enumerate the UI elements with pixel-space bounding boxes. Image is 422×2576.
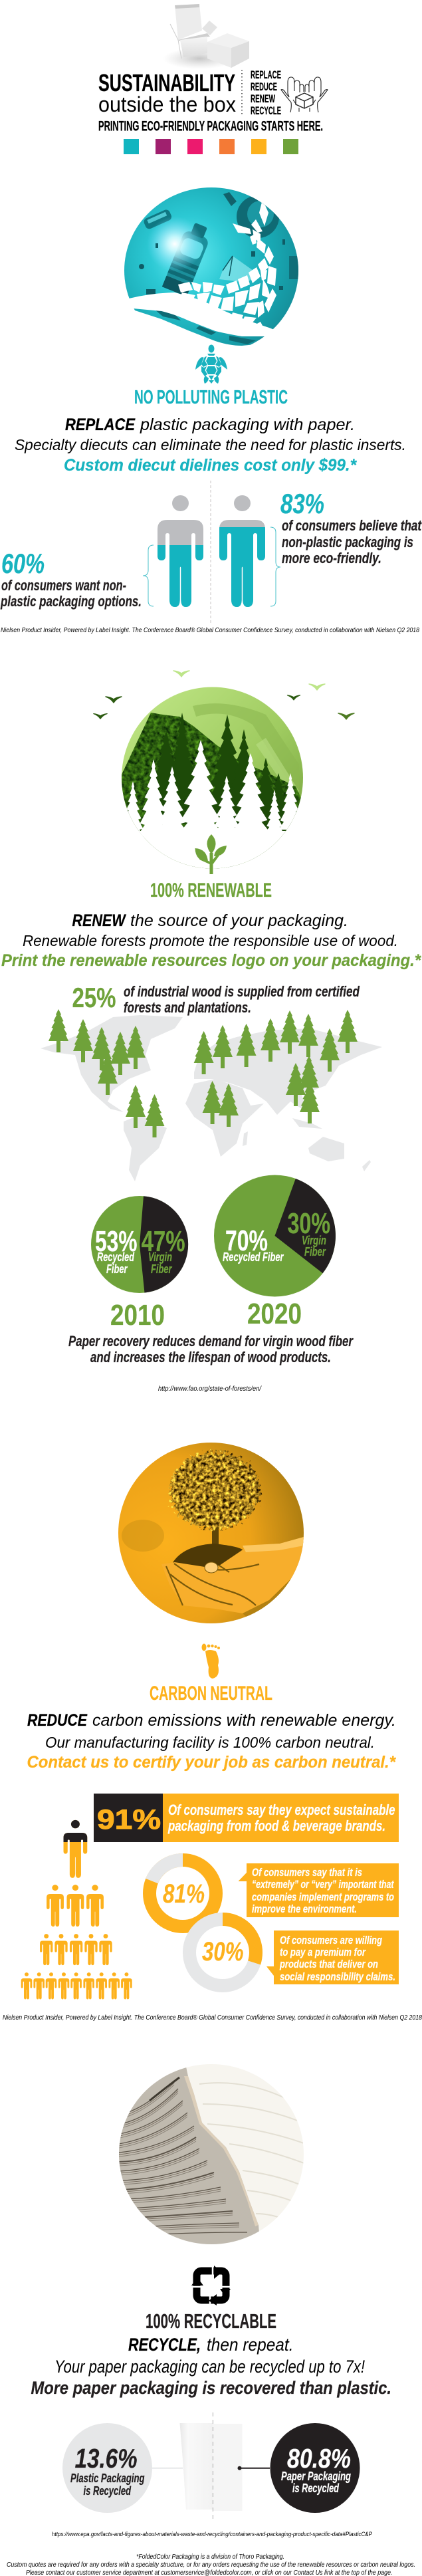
stat: 60 percent bbox=[0, 548, 142, 610]
chart: world map with trees bbox=[41, 1009, 382, 1181]
illustration: white boxes bbox=[163, 4, 249, 69]
icon: hands holding box bbox=[281, 77, 328, 112]
chart: 83 percent person bbox=[219, 495, 280, 607]
text: recycle statement: RECYCLE, bbox=[128, 2335, 201, 2355]
image: folded paper bbox=[119, 2064, 304, 2244]
text: replace reduce renew recycle bbox=[251, 68, 281, 117]
footnote: *FoldedColor Packaging is a division of Thoro Packaging. bbox=[136, 2553, 284, 2561]
icons: birds bbox=[94, 671, 354, 719]
turtle mosaic bbox=[178, 199, 276, 332]
chart: 2020 pie: 70% bbox=[225, 1225, 268, 1257]
icon: footprint bbox=[202, 1643, 220, 1679]
chart: 81 percent donut: 81% bbox=[163, 1879, 205, 1909]
icon: turtle bbox=[195, 344, 227, 384]
callout: 81 percent text bbox=[238, 1863, 399, 1917]
stat: plastic recycled: is Recycled bbox=[84, 2484, 132, 2498]
image: ocean plastic turtle bbox=[124, 187, 298, 346]
text: reduce statement: REDUCE bbox=[27, 1711, 88, 1730]
stat: 60 percent: plastic packaging options. bbox=[0, 593, 142, 610]
chart: 2010 pie: 2010 bbox=[110, 1299, 165, 1332]
stat: 25 percent certified wood: forests and plantations. bbox=[124, 999, 251, 1016]
panel: replace plastic bbox=[0, 183, 422, 634]
callout: 30 percent text: products that deliver on bbox=[279, 1958, 378, 1970]
text: recycle statement bbox=[31, 2335, 391, 2398]
stat: 83 percent: more eco-friendly. bbox=[282, 550, 381, 566]
heading: 100 percent renewable: 100% RENEWABLE bbox=[150, 879, 272, 901]
text: renew statement: RENEW bbox=[72, 911, 127, 930]
icon: recycle arrows bbox=[189, 2264, 233, 2307]
callout: 81 percent text: Of consumers say that it is bbox=[252, 1866, 362, 1879]
text: paper recovery bbox=[68, 1333, 354, 1365]
chart: 2010 pie bbox=[91, 1196, 188, 1332]
chart: 81 percent donut bbox=[140, 1850, 226, 1936]
heading: 100 percent recyclable: 100% RECYCLABLE bbox=[146, 2309, 276, 2333]
chart: 2020 pie: Virgin bbox=[302, 1234, 326, 1247]
panel: carbon neutral bbox=[3, 1439, 422, 2022]
text: reduce statement bbox=[27, 1711, 396, 1772]
text: replace statement: REPLACE bbox=[65, 415, 136, 434]
stat: 83 percent: 83% bbox=[280, 488, 324, 519]
stat: plastic recycled: 13.6% bbox=[75, 2443, 138, 2474]
chart: 2010 pie: 53% bbox=[95, 1225, 137, 1258]
stat: paper recycled: is Recycled bbox=[292, 2482, 340, 2495]
text: replace reduce renew recycle: RENEW bbox=[251, 92, 276, 105]
chart: 2010 pie: 47% bbox=[142, 1225, 185, 1258]
text: replace reduce renew recycle: RECYCLE bbox=[251, 104, 281, 117]
chart: 60 percent person bbox=[143, 495, 203, 607]
chart: 2020 pie: 2020 bbox=[247, 1298, 302, 1330]
stat: paper recycled bbox=[238, 2423, 360, 2513]
chart: 2010 pie: Virgin bbox=[148, 1250, 172, 1264]
text: reduce statement: Our manufacturing facility is 100% carbon neutral. bbox=[45, 1734, 375, 1751]
chart: 2020 pie: 30% bbox=[287, 1207, 330, 1240]
stat: plastic recycled bbox=[62, 2423, 183, 2513]
stat: 83 percent bbox=[280, 488, 422, 566]
title: SUSTAINABILITY bbox=[98, 69, 235, 96]
title: outside the box bbox=[98, 92, 236, 116]
chart: 30 percent donut bbox=[189, 1919, 256, 1986]
source url: https://www.epa.gov/facts-and-figures-about-materials-waste-and-recycling/containers-and-packaging-product-specific-data#PlasticC&P bbox=[52, 2531, 373, 2538]
text: recycle statement: then repeat. bbox=[207, 2335, 294, 2355]
lower wave band texture bbox=[154, 309, 256, 344]
chart: 2020 pie bbox=[214, 1175, 336, 1330]
text: reduce statement: Contact us to certify your job as carbon neutral.* bbox=[27, 1753, 396, 1772]
callout: 81 percent text: improve the environment. bbox=[252, 1903, 357, 1915]
footnote bbox=[7, 2553, 415, 2576]
stat: paper recycled: Paper Packaging bbox=[281, 2470, 351, 2483]
callout: 30 percent text bbox=[266, 1931, 399, 1984]
stat: 25 percent certified wood: of industrial wood is supplied from certified bbox=[124, 983, 360, 1000]
text: renew statement bbox=[1, 911, 421, 970]
icon: sprout bbox=[195, 834, 227, 874]
source url: http://www.fao.org/state-of-forests/en/ bbox=[158, 1385, 262, 1393]
text: replace reduce renew recycle: REDUCE bbox=[251, 80, 277, 93]
text: paper recovery: and increases the lifespan of wood products. bbox=[90, 1349, 331, 1365]
panel: renewable bbox=[1, 671, 421, 1393]
stat: 60 percent: of consumers want non- bbox=[1, 577, 126, 594]
callout: 91 percent bbox=[94, 1794, 399, 1842]
text: replace reduce renew recycle: REPLACE bbox=[251, 68, 281, 81]
stat: 25 percent certified wood bbox=[72, 982, 360, 1016]
text: replace statement bbox=[15, 415, 406, 475]
callout: 91 percent: 91% bbox=[97, 1804, 161, 1835]
colour swatches bbox=[124, 139, 298, 154]
chart: people pyramid bbox=[21, 1820, 132, 1999]
stat: plastic recycled: Plastic Packaging bbox=[70, 2472, 145, 2485]
text: reduce statement: carbon emissions with renewable energy. bbox=[92, 1711, 396, 1730]
panel: recyclable bbox=[7, 2057, 415, 2576]
text: replace statement: Custom diecut dielines cost only $99.* bbox=[64, 456, 357, 475]
heading: no polluting plastic: NO POLLUTING PLASTIC bbox=[134, 387, 288, 408]
image: tree in hands bbox=[116, 1439, 306, 1625]
heading: carbon neutral: CARBON NEUTRAL bbox=[150, 1683, 272, 1704]
callout: 30 percent text: Of consumers are willing bbox=[280, 1934, 382, 1946]
chart: 2020 pie: Fiber bbox=[304, 1245, 326, 1258]
text: replace statement: plastic packaging with paper. bbox=[140, 415, 355, 434]
text: renew statement: Renewable forests promote the responsible use of wood. bbox=[23, 932, 398, 949]
text: renew statement: the source of your packaging. bbox=[130, 911, 348, 930]
illustration: pouch and paper package bbox=[179, 2412, 242, 2521]
stat: paper recycled: 80.8% bbox=[287, 2443, 351, 2474]
image: forest bbox=[122, 687, 303, 868]
chart: 2010 pie: Fiber bbox=[151, 1262, 172, 1276]
header bbox=[98, 4, 328, 154]
stat: 60 percent: 60% bbox=[1, 548, 45, 579]
chart: 2010 pie: Recycled bbox=[97, 1250, 135, 1264]
title bbox=[98, 69, 236, 116]
chart: 2020 pie: Recycled Fiber bbox=[223, 1250, 284, 1264]
text: replace statement: Specialty diecuts can eliminate the need for plastic inserts. bbox=[15, 436, 406, 453]
chart: 2010 pie: Fiber bbox=[106, 1262, 128, 1276]
chart: 30 percent donut: 30% bbox=[202, 1937, 243, 1966]
callout: 30 percent text: to pay a premium for bbox=[280, 1946, 366, 1958]
stat: 25 percent certified wood: 25% bbox=[72, 982, 116, 1013]
